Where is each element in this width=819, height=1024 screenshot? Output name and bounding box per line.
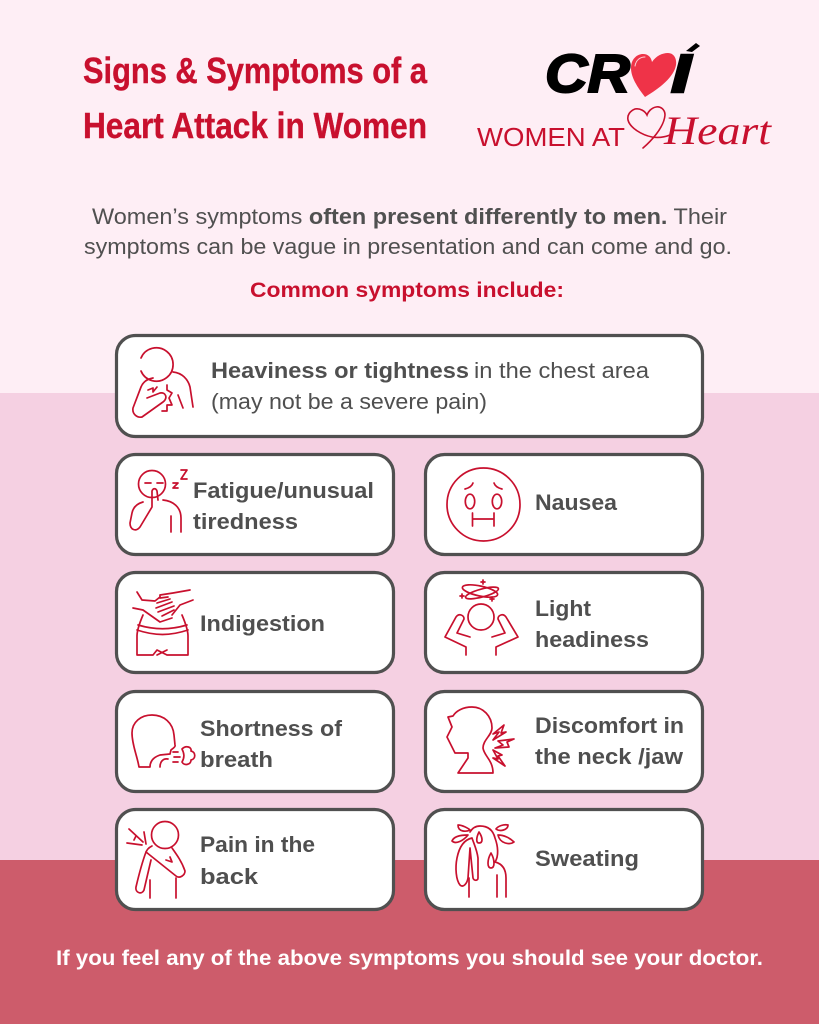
logo tagline bbox=[477, 107, 772, 153]
label bbox=[200, 832, 315, 889]
intro text: Women’s symptoms often present differently to men. Their bbox=[92, 204, 727, 229]
logo wordmark: CROI: CR bbox=[545, 44, 630, 104]
label: in the chest area bbox=[474, 358, 650, 383]
intro text: symptoms can be vague in presentation and can come and go. bbox=[84, 234, 732, 259]
card: sweating bbox=[426, 810, 702, 910]
card: pain in the back bbox=[116, 810, 394, 910]
icon: hands on stomach bbox=[133, 590, 193, 655]
icon: head profile with lightning bbox=[447, 707, 514, 773]
label: Nausea bbox=[535, 490, 617, 515]
intro text bbox=[84, 204, 732, 259]
logo: Croi Women at Heart bbox=[477, 43, 772, 153]
label: Shortness of bbox=[200, 716, 343, 741]
label: (may not be a severe pain) bbox=[211, 389, 487, 414]
icon: tired yawning person bbox=[130, 470, 187, 532]
label: Pain in the bbox=[200, 832, 315, 857]
card: heaviness or tightness bbox=[116, 336, 702, 436]
label bbox=[535, 713, 684, 769]
card: indigestion bbox=[116, 572, 394, 672]
card: discomfort in neck/jaw bbox=[426, 692, 702, 792]
title bbox=[83, 50, 428, 146]
icon: nauseous face bbox=[447, 468, 520, 541]
logo wordmark: CROI: I bbox=[671, 44, 692, 104]
label: Discomfort in bbox=[535, 713, 684, 738]
label: Indigestion bbox=[200, 611, 325, 636]
card: nausea bbox=[426, 454, 702, 554]
label: Sweating bbox=[535, 846, 639, 871]
label: tiredness bbox=[193, 509, 298, 534]
logo tagline: WOMEN AT bbox=[477, 124, 625, 152]
logo heart bbox=[631, 53, 676, 97]
logo wordmark: CROI bbox=[545, 43, 700, 104]
label: Heaviness or tightness bbox=[211, 358, 469, 383]
footer message: If you feel any of the above symptoms you should see your doctor. bbox=[56, 947, 763, 970]
icon: sweating person bbox=[452, 825, 514, 897]
card: fatigue bbox=[116, 454, 394, 554]
icon: dizzy head bbox=[445, 580, 518, 655]
label bbox=[193, 478, 374, 534]
logo tagline: Heart bbox=[663, 108, 772, 153]
label: the neck /jaw bbox=[535, 744, 684, 769]
card: shortness of breath bbox=[116, 692, 394, 792]
icon: head breathing out bbox=[132, 715, 195, 767]
label: Fatigue/unusual bbox=[193, 478, 374, 503]
label: breath bbox=[200, 747, 273, 772]
label bbox=[200, 716, 343, 772]
icon: chest pain bbox=[133, 348, 193, 417]
subheading: Common symptoms include: bbox=[250, 279, 564, 302]
icon: person holding back bbox=[127, 822, 185, 898]
label bbox=[211, 358, 650, 414]
label: back bbox=[200, 864, 259, 889]
title: Signs & Symptoms of a bbox=[83, 50, 428, 91]
card: light headiness bbox=[426, 572, 702, 672]
title: Heart Attack in Women bbox=[83, 105, 427, 146]
label: Light bbox=[535, 596, 592, 621]
label: headiness bbox=[535, 627, 649, 652]
label bbox=[535, 596, 649, 652]
